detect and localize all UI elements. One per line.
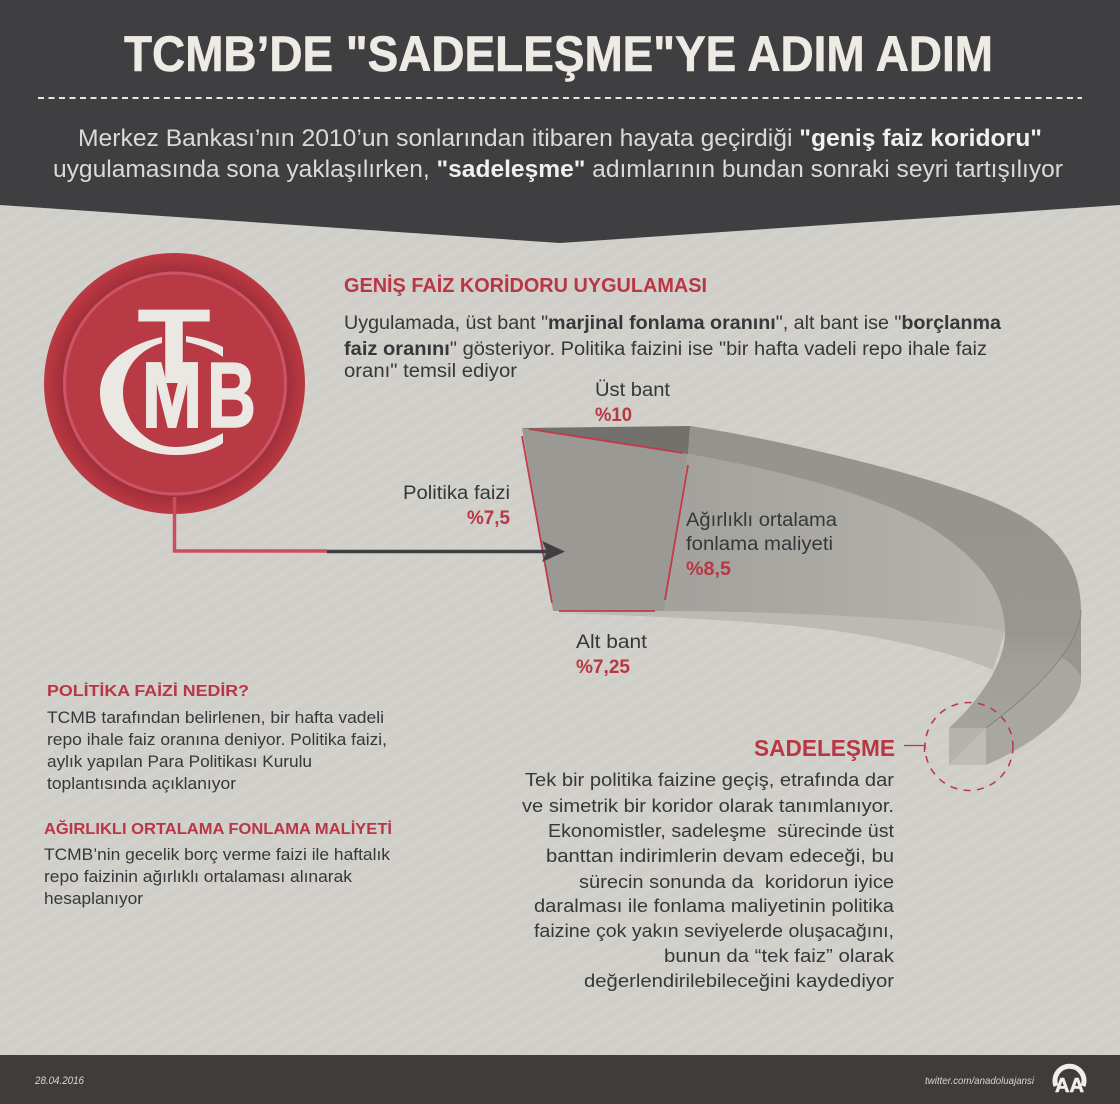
label: alt bant: Alt bant xyxy=(576,632,648,653)
subtitle xyxy=(53,125,1063,183)
label: ağırlıklı ortalama fonlama maliyeti xyxy=(686,510,837,580)
icon: TCMB logo: M xyxy=(142,343,202,447)
heading: geniş faiz koridoru: GENİŞ FAİZ KORİDORU UYGULAMASI xyxy=(344,274,707,297)
body text: faizine çok yakın seviyelerde oluşacağını, xyxy=(534,920,894,941)
title: TCMB’DE "SADELEŞME"YE ADIM ADIM xyxy=(124,26,993,82)
body text: aylık yapılan Para Politikası Kurulu xyxy=(47,753,312,771)
red line: upper band xyxy=(529,429,683,453)
body text: toplantısında açıklanıyor xyxy=(47,775,237,793)
label: alt bant: %7,25 xyxy=(576,657,630,678)
heading: SADELEŞME xyxy=(754,735,895,761)
subtitle: Merkez Bankası’nın 2010’un sonlarından itibaren hayata geçirdiği "geniş faiz koridoru" xyxy=(78,125,1042,152)
panel: politika faizi nedir xyxy=(47,682,387,793)
body text: daralması ile fonlama maliyetinin politika xyxy=(534,895,895,916)
label: üst bant: Üst bant xyxy=(595,380,671,401)
label: üst bant: %10 xyxy=(595,405,632,426)
icon: AA logo: AA xyxy=(1055,1075,1084,1097)
header banner xyxy=(0,0,1120,243)
body text: banttan indirimlerin devam edeceği, bu xyxy=(546,845,894,866)
body text: hesaplanıyor xyxy=(44,890,144,908)
ribbon top surface xyxy=(688,426,1081,728)
label: ağırlıklı ortalama fonlama maliyeti: Ağırlıklı ortalama xyxy=(686,510,837,531)
label: ağırlıklı ortalama fonlama maliyeti: fonlama maliyeti xyxy=(686,534,833,555)
icon: TCMB logo: T xyxy=(137,286,211,406)
twitter handle: twitter.com/anadoluajansi xyxy=(925,1075,1035,1087)
body text: sürecin sonunda da koridorun iyice xyxy=(579,871,894,892)
body text xyxy=(522,769,895,991)
body text: değerlendirilebileceğini kaydediyor xyxy=(584,970,894,991)
body text: bunun da “tek faiz” olarak xyxy=(664,945,895,966)
ribbon lower surface xyxy=(553,611,1005,670)
label: üst bant xyxy=(595,380,671,426)
panel: sadeleşme xyxy=(522,702,1013,991)
body text: repo faizinin ağırlıklı ortalaması alınarak xyxy=(44,868,353,886)
label: politika faizi: %7,5 xyxy=(467,508,510,529)
red line: lower band xyxy=(559,610,655,612)
label: politika faizi xyxy=(403,483,510,529)
red line: policy rate xyxy=(522,436,552,603)
text block: explanation: oranı" temsil ediyor xyxy=(344,361,518,382)
body text: Ekonomistler, sadeleşme sürecinde üst xyxy=(548,820,894,841)
panel: ağırlıklı ortalama fonlama maliyeti xyxy=(44,819,392,908)
chart: corridor ribbon xyxy=(522,426,1081,765)
body text: TCMB’nin gecelik borç verme faizi ile haftalık xyxy=(44,846,391,864)
label: alt bant xyxy=(576,632,648,678)
label: ağırlıklı ortalama fonlama maliyeti: %8,5 xyxy=(686,559,731,580)
body text xyxy=(44,846,391,908)
red line: funding cost xyxy=(665,465,688,600)
icon: TCMB logo: B xyxy=(207,343,256,447)
text block: explanation xyxy=(344,313,1001,382)
subtitle: uygulamasında sona yaklaşılırken, "sadeleşme" adımlarının bundan sonraki seyri tartışılıyor xyxy=(53,156,1063,183)
label: politika faizi: Politika faizi xyxy=(403,483,510,504)
front face xyxy=(522,428,688,611)
ribbon end square xyxy=(949,728,986,765)
ribbon outer wall upper shade xyxy=(1060,610,1081,677)
icon: TCMB logo xyxy=(44,253,305,514)
text block: explanation: faiz oranını " gösteriyor. Politika faizini ise "bir hafta vadeli repo ihale faiz xyxy=(344,339,987,360)
body text: Tek bir politika faizine geçiş, etrafında dar xyxy=(525,769,894,790)
body text: repo ihale faiz oranına deniyor. Politika faizi, xyxy=(47,731,387,749)
ribbon outer wall xyxy=(986,610,1081,765)
callout leader xyxy=(904,746,924,752)
top dark face xyxy=(522,426,690,454)
heading: POLİTİKA FAİZİ NEDİR? xyxy=(47,682,249,700)
body text xyxy=(47,709,387,793)
heading: AĞIRLIKLI ORTALAMA FONLAMA MALİYETİ xyxy=(44,819,392,838)
body text: ve simetrik bir koridor olarak tanımlanıyor. xyxy=(522,795,894,816)
callout circle xyxy=(925,702,1013,790)
arrow: logo to policy rate xyxy=(174,497,565,562)
text block: explanation: Uygulamada, üst bant " marjinal fonlama oranını ", alt bant ise "borçlanma xyxy=(344,313,1001,334)
body text: TCMB tarafından belirlenen, bir hafta vadeli xyxy=(47,709,384,727)
footer bar xyxy=(0,1055,1120,1104)
date: 28.04.2016 xyxy=(34,1075,85,1087)
ribbon inner wall xyxy=(664,454,1005,632)
